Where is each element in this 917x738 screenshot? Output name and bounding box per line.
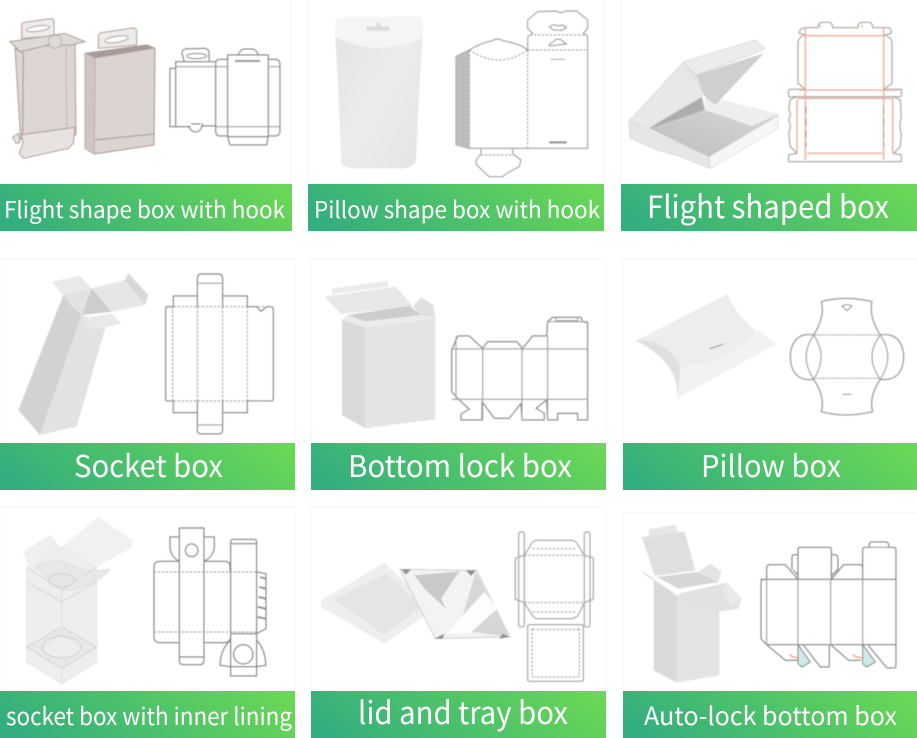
illustration: mailer box: [629, 40, 779, 168]
banner: Pillow box: [623, 442, 917, 490]
dieline: auto-lock: [761, 542, 896, 668]
panel: pillow shape box with hook: [308, 0, 604, 231]
banner: Auto-lock bottom box: [623, 691, 917, 738]
dieline: tray nets: [515, 532, 593, 681]
panel: flight shaped box: [621, 0, 917, 231]
illustration: lid and clear tray: [321, 563, 510, 644]
panel: flight shape box with hook: [0, 0, 292, 231]
panel: lid and tray box: [311, 507, 606, 738]
banner: Pillow box: Pillow box: [701, 442, 841, 486]
dieline: pillow hook box: [456, 11, 588, 177]
banner: socket box with inner lining: [0, 691, 295, 738]
illustration: pillow pack: [636, 294, 776, 398]
illustration: clear hook boxes: [10, 19, 155, 158]
banner: Socket box: [0, 442, 295, 490]
panel: pillow box: [623, 259, 917, 490]
dieline: socket box: [166, 274, 273, 434]
banner: Pillow shape box with hook: Pillow shape box with hook: [314, 191, 600, 225]
panel: socket box: [0, 259, 295, 490]
dieline: hook box: [170, 48, 280, 145]
banner: Flight shape box with hook: Flight shape box with hook: [4, 191, 285, 225]
illustration: tall socket box: [18, 273, 148, 435]
dieline: socket with lining: [154, 528, 266, 676]
panel: socket box with inner lining: [0, 507, 295, 738]
panel: auto-lock bottom box: [623, 513, 917, 738]
dieline: bottom lock: [452, 317, 588, 420]
dieline: pillow box: [790, 298, 904, 415]
illustration: auto-lock carton: [642, 525, 741, 683]
banner: lid and tray box: [311, 688, 606, 738]
banner: Flight shaped box: Flight shaped box: [647, 182, 889, 227]
panel: bottom lock box: [311, 259, 606, 490]
banner: Auto-lock bottom box: Auto-lock bottom box: [644, 697, 898, 733]
illustration: bottom lock carton: [324, 281, 435, 428]
banner: lid and tray box: lid and tray box: [358, 688, 568, 733]
illustration: translucent box with lining: [23, 517, 133, 684]
illustration: pillow pouch: [335, 17, 423, 168]
banner: Socket box: Socket box: [74, 442, 223, 486]
banner: Bottom lock box: Bottom lock box: [348, 442, 572, 486]
dieline: mailer box: [788, 22, 901, 162]
banner: socket box with inner lining: socket box with inner lining: [6, 697, 292, 732]
